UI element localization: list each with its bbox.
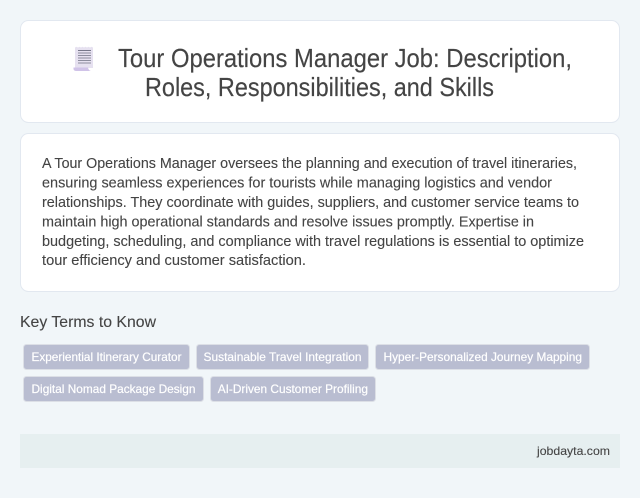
tag: sustainable travel integration: Sustainable Travel Integration <box>204 350 362 364</box>
icon: paper scroll <box>73 47 93 71</box>
panel: description <box>20 134 620 292</box>
tag: digital nomad package design <box>24 376 204 402</box>
tags: key terms <box>24 344 590 402</box>
footer source text: jobdayta.com <box>536 444 610 458</box>
tag: hyper-personalized journey mapping: Hyper-Personalized Journey Mapping <box>384 350 582 364</box>
title: Tour Operations Manager Job: Description, <box>118 45 572 73</box>
description text: ensuring seamless experiences for tourists while managing logistics and vendor <box>42 175 552 191</box>
tag: sustainable travel integration <box>196 344 368 370</box>
tag: digital nomad package design: Digital Nomad Package Design <box>32 382 196 396</box>
description text: tour efficiency and customer satisfaction. <box>42 253 306 269</box>
footer <box>20 434 620 468</box>
description text: A Tour Operations Manager oversees the planning and execution of travel itineraries, <box>42 156 577 172</box>
description text: maintain high operational standards and resolve issues promptly. Expertise in <box>42 214 534 230</box>
title <box>118 45 572 102</box>
tag: hyper-personalized journey mapping <box>376 344 590 370</box>
title: Roles, Responsibilities, and Skills <box>145 74 494 102</box>
tag: ai-driven customer profiling: AI-Driven Customer Profiling <box>218 382 368 396</box>
tag: experiential itinerary curator <box>24 344 190 370</box>
heading: key terms: Key Terms to Know <box>20 314 156 331</box>
description text <box>42 156 584 269</box>
description text: budgeting, scheduling, and compliance with travel regulations is essential to optimize <box>42 234 584 250</box>
panel: title header <box>20 20 620 122</box>
description text: relationships. They coordinate with guides, suppliers, and customer service teams to <box>42 195 579 211</box>
tag: experiential itinerary curator: Experiential Itinerary Curator <box>32 350 182 364</box>
tag: ai-driven customer profiling <box>210 376 376 402</box>
